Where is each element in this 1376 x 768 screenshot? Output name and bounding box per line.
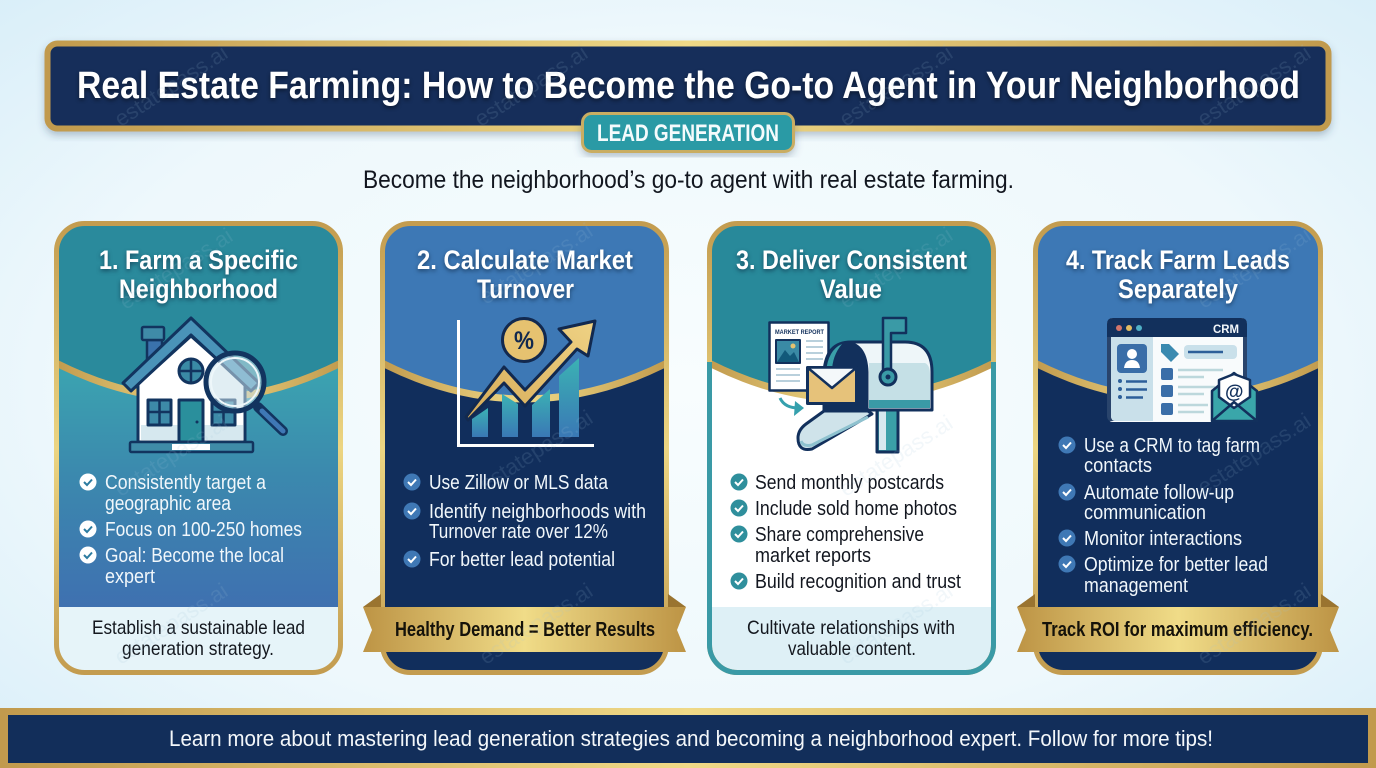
watermarks: estatepass.ai <box>110 578 232 669</box>
bullet list: management <box>1084 575 1188 597</box>
bullet list: Automate follow-up <box>1084 482 1234 504</box>
icon: CRM window with email <box>1107 318 1257 422</box>
ribbon: healthy demand: Healthy Demand = Better Results <box>395 619 655 641</box>
heading <box>99 245 298 304</box>
bullet list: Build recognition and trust <box>755 571 961 593</box>
panel: card 3 deliver consistent value <box>707 221 996 675</box>
watermarks: estatepass.ai <box>835 410 957 501</box>
panel: card 1 farm a specific neighborhood <box>54 221 343 675</box>
icon: CRM window with email: CRM <box>1213 322 1239 336</box>
watermarks: estatepass.ai <box>1193 408 1315 499</box>
watermarks: estatepass.ai <box>1193 578 1315 669</box>
footer note <box>92 617 305 660</box>
footer banner: Learn more about mastering lead generation strategies and becoming a neighborhood expert. Follow for more tips! <box>169 726 1213 751</box>
watermarks: estatepass.ai <box>1193 40 1315 131</box>
bullet list: Send monthly postcards <box>755 472 944 494</box>
bullet list: Consistently target a <box>105 472 267 494</box>
icon: growth chart: % <box>514 327 534 355</box>
watermarks: estatepass.ai <box>475 405 597 496</box>
bullet list: Focus on 100-250 homes <box>105 519 302 541</box>
panel: card 2 calculate market turnover <box>363 221 686 675</box>
ribbon: healthy demand <box>363 594 686 652</box>
bullet list: market reports <box>755 545 871 567</box>
heading <box>417 245 633 304</box>
icon: house with magnifier <box>123 318 283 452</box>
watermarks <box>110 40 1315 669</box>
watermarks: estatepass.ai <box>1193 222 1315 313</box>
heading: Neighborhood <box>119 274 278 304</box>
bullet list: Identify neighborhoods with <box>429 501 646 523</box>
heading: Turnover <box>477 274 574 304</box>
bullet list: Monitor interactions <box>1084 528 1242 550</box>
footer note: generation strategy. <box>122 638 274 660</box>
bullet list <box>1058 435 1268 597</box>
heading: Separately <box>1118 274 1238 304</box>
watermarks: estatepass.ai <box>475 578 597 669</box>
watermarks: estatepass.ai <box>835 222 957 313</box>
watermarks: estatepass.ai <box>470 40 592 131</box>
watermarks: estatepass.ai <box>110 40 232 131</box>
footer note <box>747 617 955 660</box>
ribbon: track ROI: Track ROI for maximum efficiency. <box>1042 619 1313 641</box>
bullet list: Use a CRM to tag farm <box>1084 435 1260 457</box>
heading: Value <box>820 274 882 304</box>
bullet list <box>404 472 646 571</box>
watermarks: estatepass.ai <box>835 40 957 131</box>
header banner <box>48 44 1328 128</box>
icon: growth chart <box>458 318 595 446</box>
subtitle: Become the neighborhood’s go-to agent with real estate farming. <box>363 166 1014 194</box>
icon: CRM window with email: @ <box>1225 382 1244 403</box>
heading: 4. Track Farm Leads <box>1066 245 1290 275</box>
footer note: Establish a sustainable lead <box>92 617 305 639</box>
footer note: valuable content. <box>788 638 916 660</box>
bullet list: contacts <box>1084 455 1152 477</box>
bullet list: geographic area <box>105 493 232 515</box>
icon: mailbox with report: MARKET REPORT <box>775 329 824 336</box>
badge: lead generation <box>582 114 794 152</box>
bullet list: Include sold home photos <box>755 498 957 520</box>
watermarks: estatepass.ai <box>110 410 232 501</box>
bullet list: communication <box>1084 502 1206 524</box>
watermarks: estatepass.ai <box>835 578 957 669</box>
heading <box>736 245 967 304</box>
watermarks: estatepass.ai <box>475 218 597 309</box>
panel: card 4 track farm leads separately <box>1017 221 1339 675</box>
bullet list: Turnover rate over 12% <box>429 521 608 543</box>
bullet list <box>80 472 302 588</box>
watermarks: estatepass.ai <box>115 223 237 314</box>
bullet list: For better lead potential <box>429 549 615 571</box>
bullet list: Goal: Become the local <box>105 545 284 567</box>
heading: 1. Farm a Specific <box>99 245 298 275</box>
bullet list <box>730 472 961 593</box>
footer banner <box>0 708 1376 768</box>
bullet list: Use Zillow or MLS data <box>429 472 609 494</box>
badge: lead generation: LEAD GENERATION <box>597 120 779 147</box>
footer note: Cultivate relationships with <box>747 617 955 639</box>
ribbon: track ROI <box>1017 594 1339 652</box>
heading: 2. Calculate Market <box>417 245 633 275</box>
icon: mailbox with report <box>770 318 932 452</box>
bullet list: Share comprehensive <box>755 524 924 546</box>
heading: 3. Deliver Consistent <box>736 245 967 275</box>
bullet list: expert <box>105 566 155 588</box>
bullet list: Optimize for better lead <box>1084 554 1268 576</box>
heading <box>1066 245 1290 304</box>
